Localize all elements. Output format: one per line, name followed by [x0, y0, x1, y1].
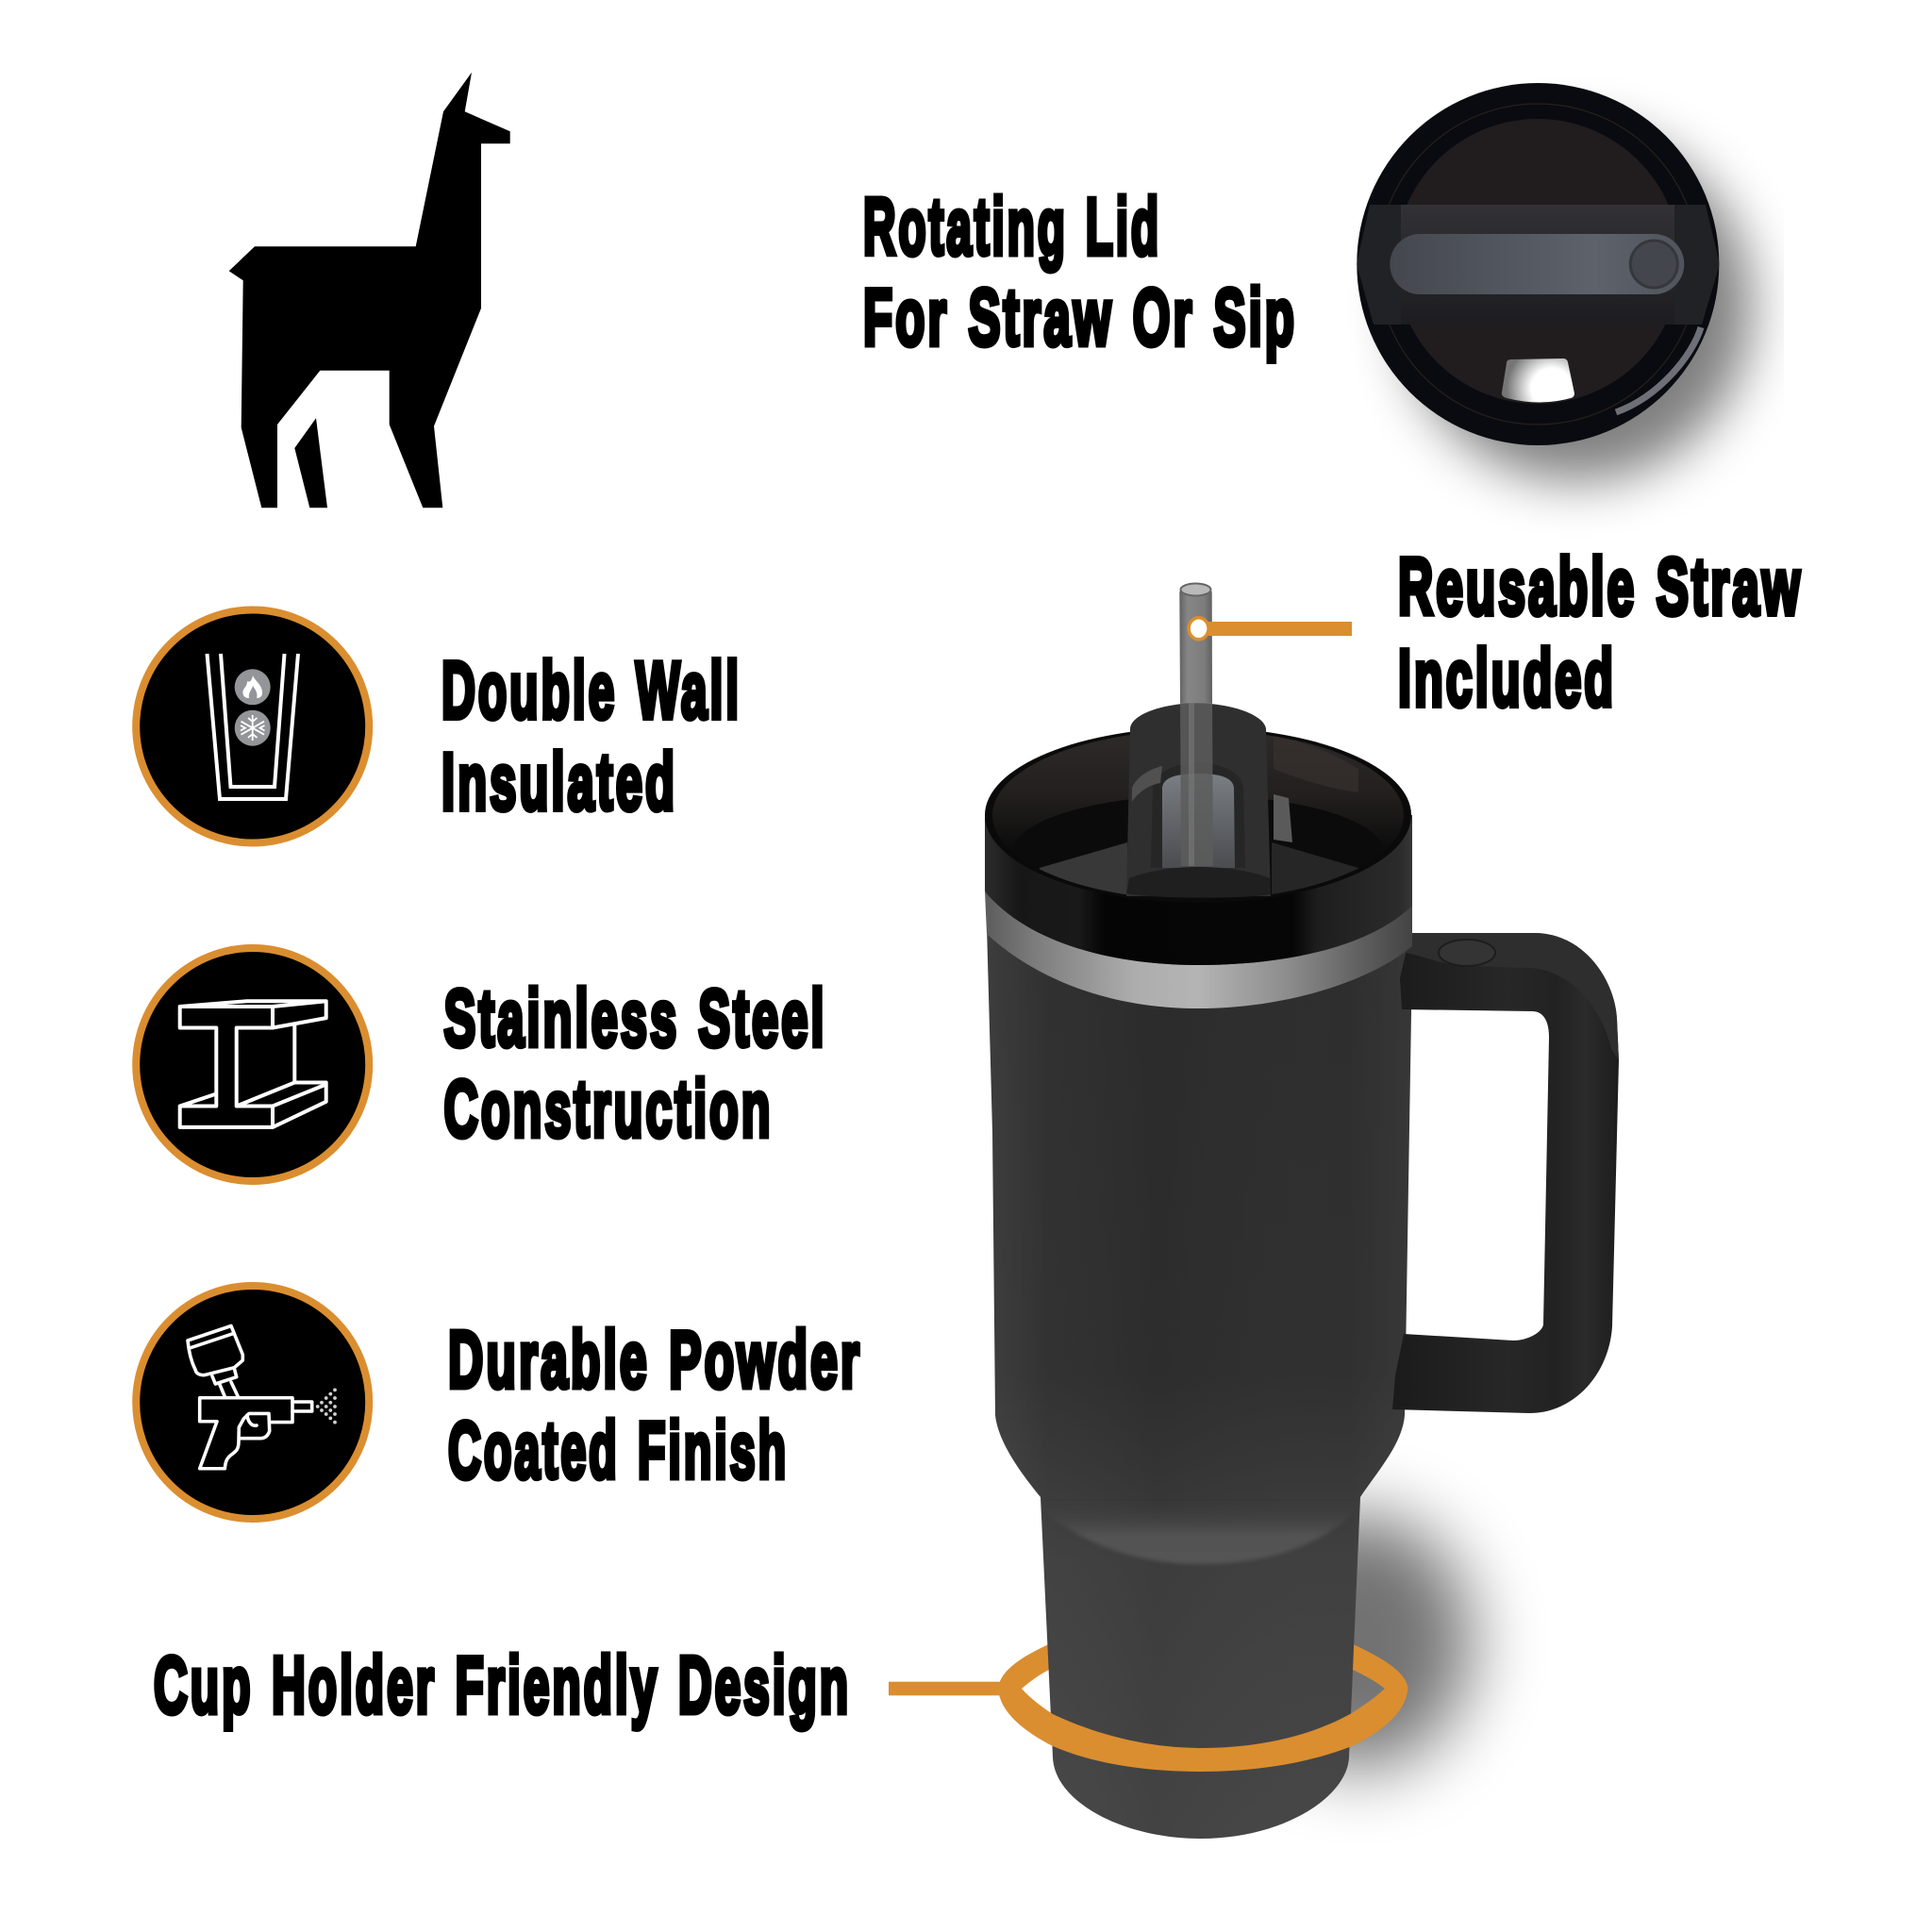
handle	[1392, 933, 1619, 1413]
text: double wall label: Insulated	[441, 738, 677, 827]
text: rotating lid label	[863, 183, 1297, 362]
text: reusable straw label	[1398, 542, 1803, 724]
text: double wall label: Double Wall	[441, 646, 741, 736]
text: stainless steel label: Stainless Steel	[443, 974, 826, 1064]
lid: sliding straw port	[1126, 703, 1271, 898]
text: stainless steel label	[443, 974, 826, 1155]
lid: black rim with opening	[985, 727, 1412, 965]
text: double wall label	[441, 646, 741, 827]
text: rotating lid label: Rotating Lid	[863, 183, 1161, 272]
text: durable powder label	[448, 1316, 862, 1496]
text: durable powder label: Durable Powder	[448, 1316, 862, 1406]
text: reusable straw label: Included	[1398, 634, 1616, 724]
text: cup holder label: Cup Holder Friendly Design	[154, 1641, 851, 1730]
text: rotating lid label: For Straw Or Sip	[863, 274, 1297, 362]
lid: stainless steel band	[985, 891, 1412, 1008]
icon: stainless steel I-beam badge	[136, 948, 369, 1181]
tumbler body	[986, 891, 1412, 1839]
callout: cup holder ring back half	[998, 1642, 1408, 1689]
callout: cup holder ring front and pointer line	[889, 1682, 1408, 1772]
tumbler cast shadow	[1245, 1514, 1472, 1769]
product photo: rotating lid top view	[1357, 83, 1752, 481]
icon: powder coat spray gun badge	[136, 1286, 369, 1519]
icon: llama logo	[229, 73, 510, 508]
callout: straw pointer line and dot	[1189, 618, 1352, 640]
icon: double wall insulated badge	[136, 609, 369, 843]
text: durable powder label: Coated Finish	[448, 1407, 789, 1496]
text: stainless steel label: Construction	[443, 1065, 774, 1155]
reusable straw	[1179, 583, 1213, 866]
